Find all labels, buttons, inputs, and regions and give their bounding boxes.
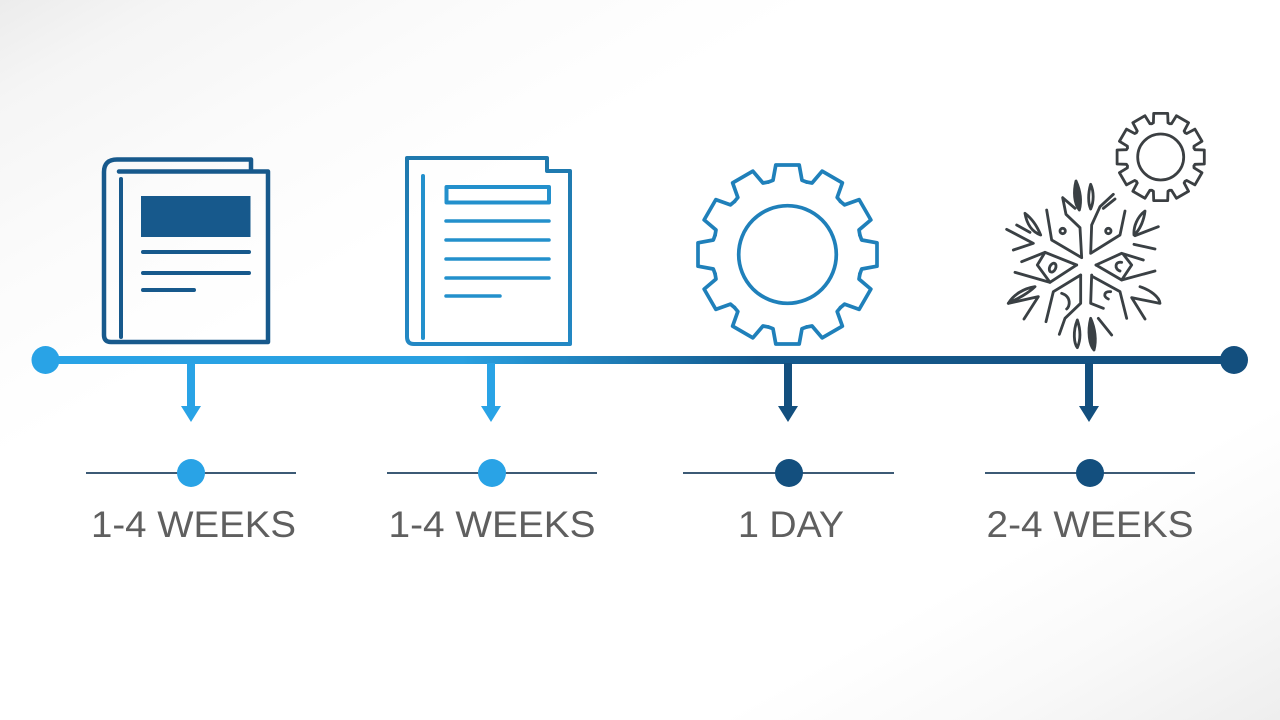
label: step 1 duration: 1-4 WEEKS [91,504,296,545]
icon: large gear [698,165,877,344]
arrow: step 4 [1079,363,1099,422]
arrow: step 1 [181,363,201,422]
icon: document [407,158,570,344]
label: step 2 duration: 1-4 WEEKS [388,504,596,545]
marker: step 3 [683,459,894,487]
timeline bar [32,346,1248,374]
label: step 4 duration: 2-4 WEEKS [986,504,1194,545]
marker: step 1 [86,459,296,487]
marker: step 2 [387,459,597,487]
icon: book [104,160,268,342]
icon: small gear [1117,113,1204,201]
arrow: step 3 [778,363,798,422]
marker: step 4 [985,459,1195,487]
icon: snowflake [1007,181,1160,350]
arrow: step 2 [481,363,501,422]
label: step 3 duration: 1 DAY [738,504,844,545]
